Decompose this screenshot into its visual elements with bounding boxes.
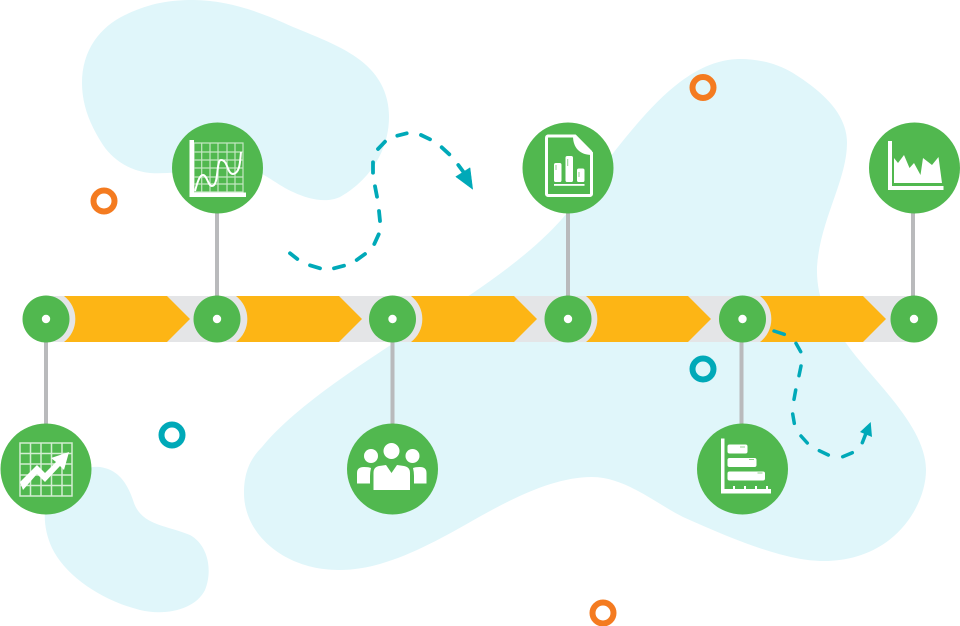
node centre dots <box>42 315 918 323</box>
ring: teal left <box>162 424 182 446</box>
ring: orange top <box>692 77 714 98</box>
ring: teal right <box>692 358 714 380</box>
timeline nodes <box>22 296 938 342</box>
background blob: large right <box>244 59 926 570</box>
icon: rising arrow chart <box>0 424 92 514</box>
icon: horizontal bar chart <box>697 424 788 514</box>
icon: line graph <box>172 122 263 214</box>
timeline track <box>46 296 914 342</box>
background blob: top left <box>82 0 389 200</box>
ring: orange bottom <box>592 602 614 624</box>
connector lines <box>44 212 915 426</box>
background blob: bottom left <box>45 467 209 612</box>
chevron arrows <box>64 296 886 342</box>
icon: document with bars <box>522 122 614 214</box>
dashed arrow: bottom right <box>774 331 872 457</box>
icon: group of people <box>347 424 438 514</box>
dashed arrow: top <box>290 133 473 268</box>
icon: area chart <box>869 122 960 214</box>
ring: orange left <box>94 190 114 212</box>
